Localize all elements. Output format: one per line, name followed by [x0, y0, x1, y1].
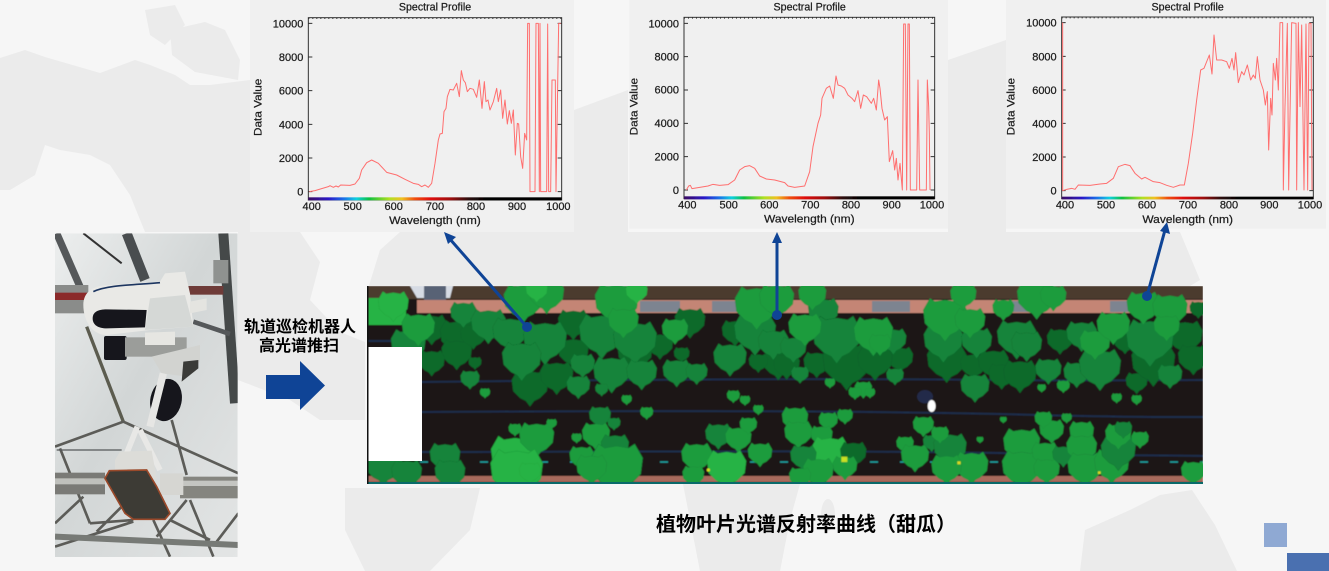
chart 1 x axis labels: 500 [344, 201, 362, 213]
chart 2 y axis title: Data Value [629, 78, 641, 135]
chart 3 plot frame [1062, 17, 1313, 199]
decorative corner square, dark [1287, 553, 1329, 571]
chart 1 y axis title: Data Value [252, 79, 264, 136]
chart 2 y axis labels: 0 [673, 185, 679, 197]
chart 2 x axis labels: 400 [678, 199, 696, 211]
chart 3 x axis labels [1056, 199, 1322, 211]
chart 2 y axis labels: 2000 [655, 152, 679, 164]
arrow: leaf 3 to chart 3 [1142, 222, 1170, 301]
chart 3 reflectance curve [1063, 23, 1312, 191]
chart 1 x axis labels [303, 201, 571, 213]
chart 2 x axis labels: 600 [760, 199, 778, 211]
label: rail inspection robot hyperspectral push-broom: 轨道巡检机器人 [244, 317, 356, 336]
chart 1 y axis labels: 2000 [279, 153, 303, 165]
chart 2 x axis labels [678, 199, 944, 211]
chart 3 x axis labels: 500 [1097, 199, 1115, 211]
chart 1 y axis labels: 4000 [279, 119, 303, 131]
chart 1 y axis labels: 0 [297, 187, 303, 199]
arrow: leaf 1 to chart 1 [444, 232, 532, 332]
chart 1 x axis labels: 900 [508, 201, 526, 213]
crop leaves, left half [364, 279, 794, 501]
photo: rail inspection robot in greenhouse [55, 233, 238, 557]
chart 3 title: Spectral Profile [1152, 1, 1224, 13]
chart 2 x axis labels: 900 [882, 199, 901, 211]
chart 1 x axis labels: 400 [303, 201, 321, 213]
chart 1 reflectance curve [309, 23, 561, 192]
chart 2 reflectance curve [686, 24, 930, 190]
chart 3 x axis labels: 800 [1220, 199, 1238, 211]
chart 3 y axis labels: 8000 [1032, 51, 1057, 63]
panel: spectral profile chart 1 [250, 0, 574, 232]
label: rail inspection robot hyperspectral push-broom: 高光谱推扫 [259, 336, 339, 355]
chart 3 x axis title: Wavelength (nm) [1142, 214, 1233, 226]
chart 1 x axis title: Wavelength (nm) [389, 215, 481, 227]
chart 2 y axis labels: 8000 [655, 51, 679, 63]
chart 3 y axis title: Data Value [1006, 78, 1018, 135]
chart 3 x axis labels: 700 [1179, 199, 1197, 211]
chart 2 plot frame [684, 17, 935, 199]
chart 2 x axis labels: 800 [842, 199, 860, 211]
chart 1 x axis labels: 600 [385, 201, 403, 213]
chart 1 title: Spectral Profile [399, 2, 471, 14]
chart 1 y axis labels: 8000 [279, 52, 303, 64]
chart 3 y axis labels: 4000 [1032, 118, 1057, 130]
image left edge [367, 286, 368, 484]
chart 1 plot frame [308, 18, 562, 200]
arrow: block arrow pointing right [266, 361, 325, 410]
chart 2 y axis labels: 4000 [655, 118, 679, 130]
chart 1 y axis labels: 10000 [273, 18, 303, 30]
chart 1 y axis labels [273, 18, 303, 199]
chart 3 y axis labels: 2000 [1032, 152, 1057, 164]
chart 1 x axis labels: 1000 [546, 201, 571, 213]
chart 3 y axis labels [1026, 18, 1057, 198]
crop leaves, right half [774, 280, 1208, 489]
panel: spectral profile chart 2 [629, 0, 948, 229]
chart 2 x axis title: Wavelength (nm) [764, 213, 855, 225]
chart 2 y axis labels: 10000 [648, 18, 679, 30]
chart 3 wavelength colour bar [1062, 197, 1313, 199]
arrow: leaf 2 to chart 2 [772, 232, 782, 320]
chart 2 x axis labels: 700 [801, 199, 819, 211]
hyperspectral false-colour image of melon crop [368, 286, 1203, 482]
chart 3 y axis labels: 6000 [1032, 85, 1057, 97]
label: rail inspection robot hyperspectral push-broom [244, 317, 356, 355]
chart 3 x axis labels: 900 [1260, 199, 1278, 211]
chart 2 y axis labels: 6000 [655, 85, 679, 97]
chart 2 y axis labels [648, 18, 679, 197]
chart 3 x axis labels: 600 [1138, 199, 1156, 211]
chart 3 x axis labels: 400 [1056, 199, 1074, 211]
image baseline [367, 482, 1203, 484]
chart 3 y axis labels: 0 [1051, 186, 1057, 198]
panel: spectral profile chart 3 [1006, 0, 1326, 229]
chart 1 y axis labels: 6000 [279, 86, 303, 98]
chart 1 x axis labels: 700 [426, 201, 444, 213]
decorative corner square, light [1264, 523, 1287, 547]
chart 1 wavelength colour bar [308, 197, 562, 200]
chart 2 wavelength colour bar [684, 196, 935, 199]
chart 2 x axis labels: 1000 [920, 199, 944, 211]
caption: 植物叶片光谱反射率曲线（甜瓜） [656, 512, 956, 536]
chart 3 y axis labels: 10000 [1026, 18, 1057, 30]
chart 2 x axis labels: 500 [720, 199, 738, 211]
chart 2 title: Spectral Profile [774, 2, 846, 14]
chart 1 x axis labels: 800 [467, 201, 485, 213]
chart 3 x axis labels: 1000 [1298, 199, 1322, 211]
